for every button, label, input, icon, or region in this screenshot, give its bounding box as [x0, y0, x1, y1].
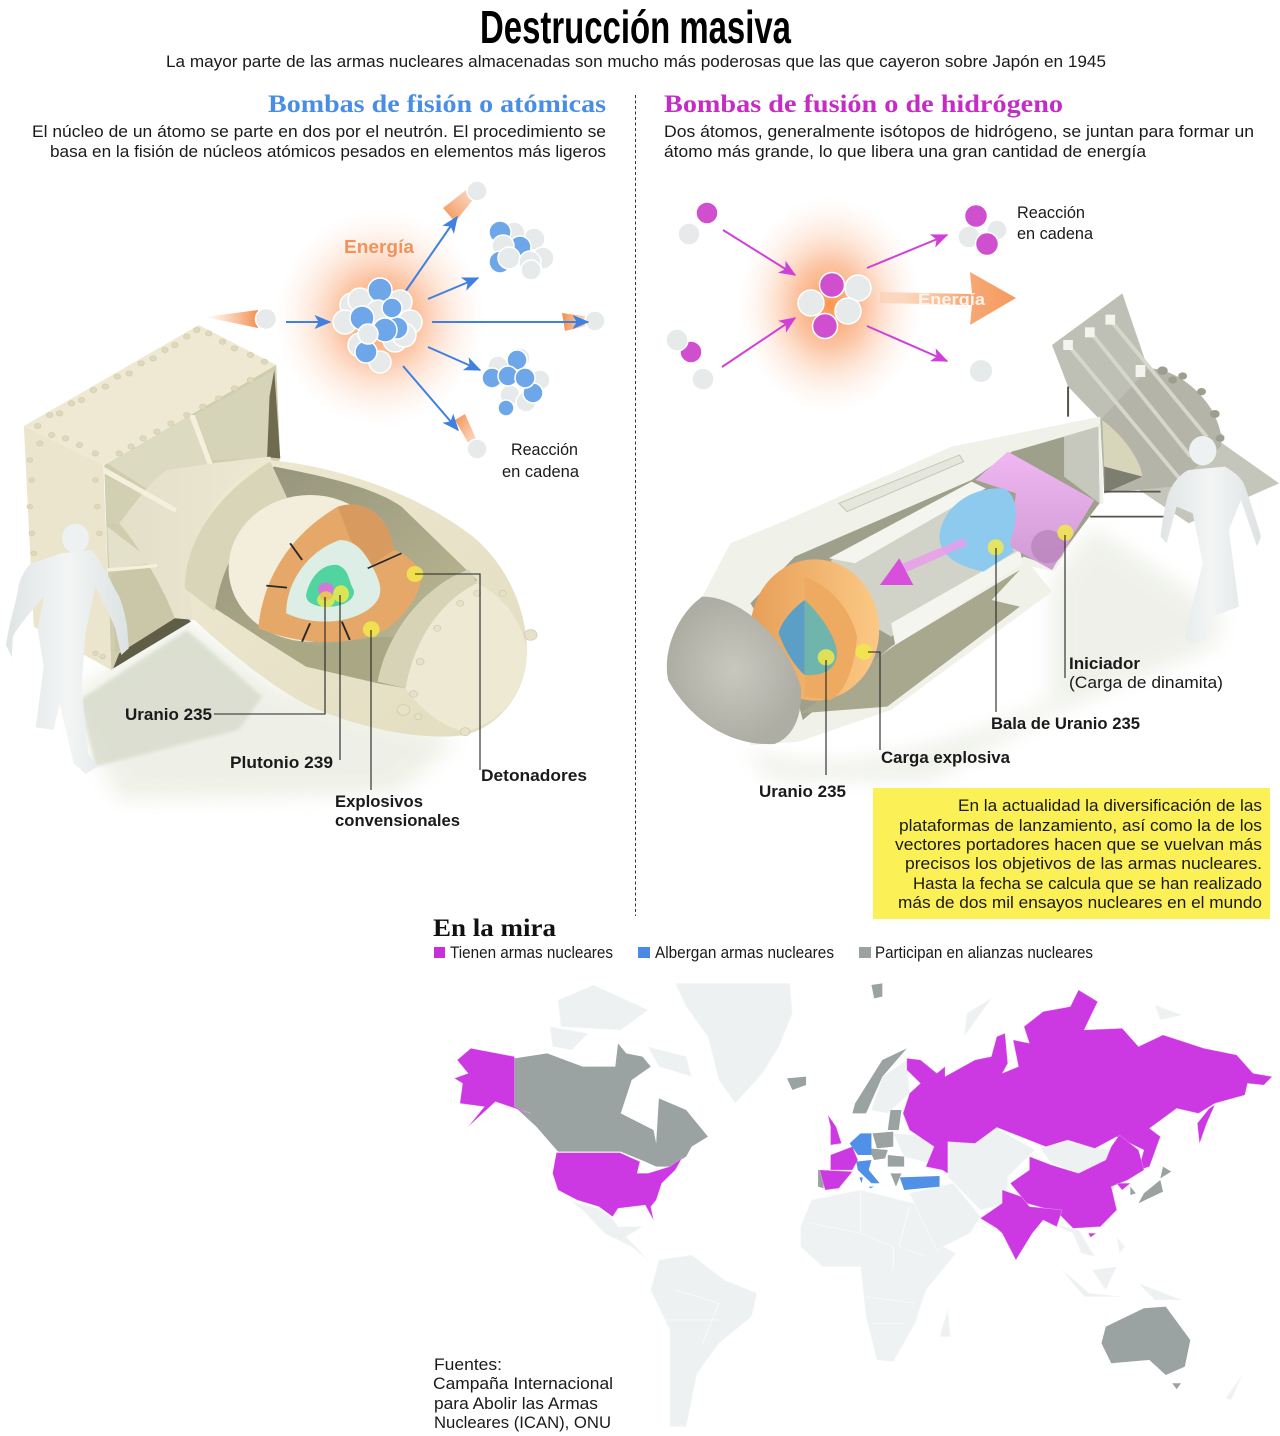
energy glow: fission — [275, 210, 485, 426]
energy arrow right: Energía — [918, 290, 986, 309]
nuclear-armed countries — [455, 990, 1272, 1260]
diagram: fusion chain reaction — [666, 202, 1007, 390]
legend: Albergan armas nucleares — [655, 943, 834, 962]
atom cluster bottom — [482, 348, 550, 416]
tail flange — [1100, 368, 1221, 493]
arrows — [286, 217, 588, 430]
energy arrow right — [880, 272, 1016, 325]
rivets of tail box — [27, 327, 268, 659]
callouts: fusion bomb: (Carga de dinamita) — [1069, 673, 1223, 692]
callout: yellow box — [873, 788, 1270, 919]
callouts: fission bomb: Uranio 235 — [125, 705, 212, 724]
text: fusion description: átomo más grande, lo que libera una gran cantidad de energía — [664, 142, 1147, 161]
callouts: fusion bomb: Carga explosiva — [881, 748, 1011, 767]
label: energía left: Energía — [344, 237, 415, 257]
legend: Tienen armas nucleares — [450, 943, 613, 962]
heading: en la mira: En la mira — [433, 915, 557, 942]
text: fission description: El núcleo de un átomo se parte en dos por el neutrón. El procedimiento se — [32, 122, 606, 141]
neutron comet — [205, 308, 276, 330]
text: fission description — [32, 122, 606, 161]
atom cluster centre — [333, 278, 422, 373]
callout: yellow box: Hasta la fecha se calcula que se han realizado — [913, 874, 1262, 893]
subtitle: La mayor parte de las armas nucleares almacenadas son mucho más poderosas que las que cayeron sobre Japón en 1945 — [166, 52, 1106, 71]
atoms bottom left — [666, 329, 714, 390]
atom cluster top — [489, 221, 554, 281]
callouts: fission bomb — [125, 574, 587, 830]
heading: fission: Bombas de fisión o atómicas — [268, 91, 606, 118]
sources: para Abolir las Armas — [434, 1394, 598, 1413]
label: reacción right: en cadena — [1017, 224, 1094, 243]
atoms centre — [798, 272, 871, 338]
sources: Fuentes: — [434, 1355, 502, 1374]
neutron right — [970, 360, 992, 382]
callout: yellow box: plataformas de lanzamiento, así como la de los — [899, 816, 1262, 835]
panel: fission heading and text — [32, 91, 606, 161]
callouts: fusion bomb: Bala de Uranio 235 — [991, 714, 1140, 733]
callouts: fission bomb: convensionales — [335, 811, 460, 830]
legend — [434, 943, 1093, 962]
callouts: fusion bomb: Iniciador — [1069, 654, 1140, 673]
sources — [433, 1355, 613, 1432]
sources: Nucleares (ICAN), ONU — [434, 1413, 611, 1432]
callouts: fusion bomb — [759, 535, 1223, 801]
panel: fusion heading and text — [664, 91, 1254, 161]
callout: yellow box: más de dos mil ensayos nucleares en el mundo — [898, 893, 1262, 912]
energy direction arrow — [880, 538, 968, 585]
callout: yellow box: vectores portadores hacen que se vuelvan más — [895, 835, 1262, 854]
illustration: fusion bomb — [667, 293, 1279, 780]
title: Destrucción masiva — [480, 1, 791, 53]
label: reacción left: en cadena — [502, 462, 580, 481]
sources: Campaña Internacional — [433, 1374, 613, 1393]
text: fission description: basa en la fisión de núcleos atómicos pesados en elementos más ligeros — [50, 142, 606, 161]
label: reacción right: Reacción — [1017, 203, 1085, 222]
callout: yellow box: precisos los objetivos de las armas nucleares. — [905, 854, 1262, 873]
label: reacción left: Reacción — [511, 440, 578, 459]
diagram: fission chain reaction — [205, 181, 605, 459]
illustration: fission bomb — [6, 325, 537, 800]
label: reacción left — [502, 440, 580, 481]
heading: fusion: Bombas de fusión o de hidrógeno — [664, 91, 1063, 118]
alliance countries — [514, 983, 1190, 1389]
figure: man left — [6, 524, 129, 774]
text: fusion description: Dos átomos, generalmente isótopos de hidrógeno, se juntan para formar un — [664, 122, 1254, 141]
atoms result top — [958, 204, 1007, 256]
arrows magenta — [722, 230, 947, 367]
callouts: fission bomb: Detonadores — [481, 766, 587, 785]
vent panel — [839, 455, 964, 512]
figure: man right — [1161, 436, 1261, 643]
callout: yellow box: En la actualidad la diversificación de las — [958, 796, 1262, 815]
callouts: fission bomb: Explosivos — [335, 792, 423, 811]
text: fusion description — [664, 122, 1254, 161]
energy glow: fusion — [738, 197, 922, 413]
unaffiliated land — [550, 983, 1242, 1427]
callouts: fusion bomb: Uranio 235 — [759, 782, 846, 801]
atoms top left — [678, 202, 718, 245]
legend: Participan en alianzas nucleares — [875, 943, 1093, 962]
callouts: fission bomb: Plutonio 239 — [230, 753, 333, 772]
world map — [455, 983, 1272, 1427]
hosting countries — [850, 1133, 940, 1190]
label: reacción right — [1017, 203, 1094, 243]
markers: yellow dots right — [818, 525, 1073, 665]
markers: yellow dots left — [317, 566, 423, 637]
escaping neutrons — [443, 181, 605, 459]
